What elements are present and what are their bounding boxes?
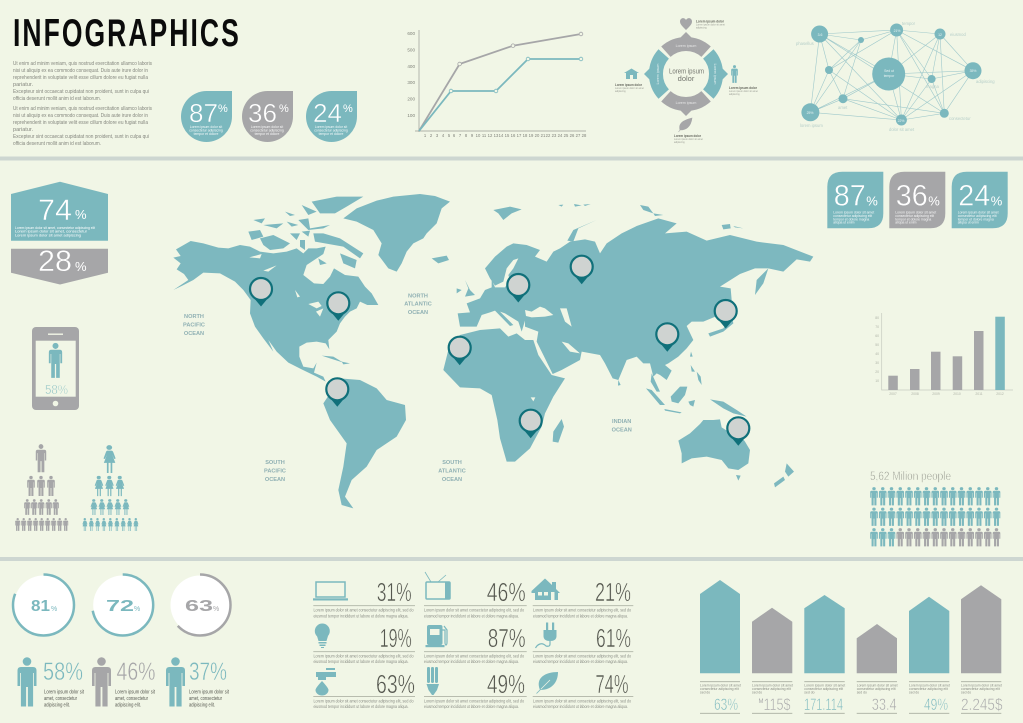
person stat 58%	[18, 657, 84, 708]
tab stat 87%	[827, 172, 883, 228]
tab stat 87%: consectetur adipiscing elit	[833, 214, 872, 218]
person stat 58%: amet, consectetur	[44, 696, 77, 702]
line chart: 100	[407, 113, 415, 118]
intro text block: Ut enim ad minim veniam, quis nostrud exercitation ullamco laboris	[13, 106, 152, 112]
house caption: Lorem ipsum dolor sit amet	[615, 87, 644, 90]
line chart: 10	[476, 133, 481, 138]
drop stat 24%: tempor et dolore	[319, 132, 343, 136]
arrow bar 2.245$: sed do	[961, 690, 971, 694]
stat grid: tv 46%: 46%	[487, 577, 526, 607]
people pyramid: men	[15, 444, 68, 531]
drop stat 87%	[181, 91, 232, 142]
line chart: 7	[459, 133, 462, 138]
network diagram: magna	[926, 84, 939, 89]
stat grid: fuel pump 87%: Lorem ipsum dolor sit amet consectetur adipiscing elit, sed do	[424, 654, 524, 658]
line chart: 600	[407, 31, 415, 36]
ocean label: north atlantic: NORTH	[408, 294, 428, 300]
people count heading: 5,62 Milion people	[870, 471, 951, 483]
title: INFOGRAPHICS	[13, 12, 239, 55]
bar chart: 50	[875, 343, 879, 347]
icon: person	[731, 65, 738, 83]
network diagram: amet	[838, 105, 848, 110]
person stat 37%: amet, consectetur	[189, 696, 222, 702]
donut 81%	[13, 574, 74, 636]
stat grid: energy-saving lamp 49%: Lorem ipsum dolor sit amet consectetur adipiscing elit, sed do	[424, 698, 524, 704]
intro text block: Ut enim ad minim veniam, quis nostrud exercitation ullamco laboris	[13, 61, 152, 67]
leaf caption	[674, 134, 703, 144]
cycle diagram: Lorem ipsum	[676, 44, 696, 48]
stat grid: light bulb 19%	[313, 623, 415, 664]
ocean label: indian	[612, 419, 632, 434]
stat grid: faucet 63%: Lorem ipsum dolor sit amet consectetur adipiscing elit, sed do	[314, 698, 414, 704]
person stat 37%	[166, 657, 229, 708]
person stat 58%: 58%	[43, 658, 83, 686]
person caption	[729, 86, 758, 96]
hexagon stat 28%	[11, 245, 108, 284]
stat grid: laptop 31%: eiusmod tempor incididunt ut labore et dolore magna aliqua.	[314, 614, 408, 618]
donut 81%: %	[51, 606, 57, 613]
ocean label: south pacific	[264, 460, 286, 483]
smartphone stat 58%	[32, 327, 79, 410]
bar chart: 80	[875, 316, 879, 320]
bar chart: 20	[875, 370, 879, 374]
stat grid: laptop 31%: Lorem ipsum dolor sit amet consectetur adipiscing elit, sed do	[314, 608, 414, 612]
tab stat 87%: 87	[834, 180, 866, 213]
heart caption	[696, 20, 725, 30]
icon: house	[624, 68, 639, 79]
people pyramid: women	[82, 445, 138, 531]
bar chart: 2007	[889, 392, 897, 396]
drop stat 87%: Lorem ipsum dolor sit	[190, 125, 222, 129]
tab stat 87%: aliqua ut enim	[833, 221, 855, 225]
americas and greenland	[173, 194, 450, 508]
people count pictogram	[870, 487, 1000, 546]
tab stat 24%: %	[991, 194, 1003, 209]
tab stat 24%: 24	[958, 180, 990, 213]
drop stat 36%: tempor et dolore	[255, 132, 279, 136]
stat grid: tv 46%: Lorem ipsum dolor sit amet consectetur adipiscing elit, sed do	[424, 608, 524, 612]
stat grid: fuel pump 87%	[424, 623, 527, 664]
tab stat 36%: tempor et dolore magna	[895, 217, 931, 221]
top section divider	[0, 156, 1023, 160]
donut 63%	[170, 574, 230, 636]
arrow bar 49%: Lorem ipsum dolor sit amet	[909, 684, 950, 688]
network diagram: 35%	[970, 69, 976, 73]
line chart: 2	[430, 133, 433, 138]
donut 72%: %	[134, 606, 140, 613]
intro text block	[13, 61, 152, 147]
line chart: 12	[488, 133, 493, 138]
drop stat 36%: %	[279, 103, 289, 115]
network diagram: dolor sit amet	[889, 127, 915, 132]
stat grid: leaf 74%: 74%	[596, 669, 628, 699]
stat grid: laptop 31%: 31%	[377, 577, 412, 607]
line chart: 21	[541, 133, 546, 138]
hexagon stat 74%: 74	[38, 194, 72, 227]
line chart: 18	[523, 133, 528, 138]
person stat 37%: adipiscing elit.	[189, 702, 215, 708]
icon: heart	[680, 18, 692, 30]
stat grid: house 21%: 21%	[595, 577, 631, 607]
ocean label: north atlantic: ATLANTIC	[404, 302, 432, 308]
intro text block: officia deserunt mollit anim id est laborum.	[13, 96, 101, 102]
line chart: 17	[517, 133, 522, 138]
cycle diagram: Lorem ipsum	[676, 101, 696, 105]
line chart: 8	[465, 133, 468, 138]
arrow bar 33.4: Lorem ipsum dolor sit amet	[857, 684, 898, 688]
stat grid: plug 61%: 61%	[596, 623, 631, 653]
bar chart: 10	[875, 379, 879, 383]
stat grid: leaf 74%: eiusmod tempor incididunt ut labore et dolore magna aliqua.	[533, 704, 628, 709]
tab stat 24%	[952, 172, 1008, 228]
tab stat 36%	[889, 172, 945, 228]
ocean label: indian: INDIAN	[612, 419, 631, 425]
ocean label: north pacific: PACIFIC	[183, 322, 205, 328]
stat grid: energy-saving lamp 49%	[424, 667, 527, 709]
stat grid: faucet 63%: eiusmod tempor incididunt ut labore et dolore magna aliqua.	[314, 704, 408, 709]
ocean label: south pacific: OCEAN	[265, 477, 285, 483]
arrow bar 63%	[700, 580, 741, 714]
line chart: 6	[453, 133, 456, 138]
arrow bar 115$	[752, 608, 793, 714]
arrow bar 115$: M	[758, 699, 764, 705]
cycle diagram: Lorem ipsum	[669, 66, 704, 76]
ocean label: south pacific: SOUTH	[265, 460, 285, 466]
donut 63%: 63	[185, 598, 213, 615]
arrow bar 2.245$: consectetur adipiscing elit	[961, 687, 1000, 691]
intro text block: nisi ut aliquip ex ea commodo consequat. Duis aute irure dolor in	[13, 68, 148, 74]
bar chart: 2010	[953, 392, 961, 396]
tab stat 36%: %	[928, 194, 940, 209]
network diagram	[796, 21, 995, 132]
arrow bar 63%: Lorem ipsum dolor sit amet	[700, 684, 741, 688]
map pins	[250, 256, 749, 446]
house caption: adipiscing	[615, 90, 626, 93]
stat grid: house 21%	[532, 577, 633, 618]
ocean label: south pacific: PACIFIC	[264, 468, 286, 474]
drop stat 24%: 24	[313, 98, 342, 128]
network diagram: adipiscing	[976, 79, 995, 84]
drop stat 87%: 87	[189, 98, 218, 128]
stat grid: light bulb 19%: Lorem ipsum dolor sit amet consectetur adipiscing elit, sed do	[314, 654, 414, 658]
drop stat 24%: Lorem ipsum dolor sit	[315, 125, 347, 129]
heart caption: Lorem ipsum dolor	[696, 20, 725, 24]
stat grid: energy-saving lamp 49%: 49%	[487, 669, 525, 699]
network diagram: consectetur	[949, 116, 971, 121]
line chart: 16	[511, 133, 516, 138]
ocean label: north atlantic: OCEAN	[408, 310, 428, 316]
intro text block: Excepteur sint occaecat cupidatat non proident, sunt in culpa qui	[13, 89, 149, 95]
stat grid: tv 46%: eiusmod tempor incididunt ut labore et dolore magna aliqua.	[424, 614, 519, 618]
line chart: 26	[570, 133, 575, 138]
drop stat 24%	[306, 91, 357, 142]
arrow bar 49%: 49%	[924, 695, 948, 714]
intro text block: pariatur.	[13, 127, 33, 133]
arrow bar 115$: 115$	[764, 695, 791, 714]
cycle diagram: Lorem ipsum	[656, 64, 660, 84]
arrow bar 49%: consectetur adipiscing elit	[909, 687, 948, 691]
stat grid: plug 61%: Lorem ipsum dolor sit amet consectetur adipiscing elit, sed do	[533, 654, 631, 658]
line chart: 15	[505, 133, 510, 138]
line chart: 22	[546, 133, 551, 138]
person stat 46%	[92, 657, 156, 708]
drop stat 36%: consectetur adipiscing	[250, 128, 284, 132]
intro text block: nisi ut aliquip ex ea commodo consequat. Duis aute irure dolor in	[13, 113, 148, 119]
network diagram: phasellus	[796, 41, 814, 46]
line chart: 5	[448, 133, 451, 138]
network diagram: 25%	[807, 111, 813, 115]
stat grid: tv 46%	[424, 572, 527, 618]
stat grid: plug 61%: eiusmod tempor incididunt ut labore et dolore magna aliqua.	[533, 659, 628, 664]
line chart: 200	[407, 96, 415, 102]
tab stat 24%: Lorem ipsum dolor sit amet	[958, 211, 999, 215]
bar chart: 2011	[975, 392, 983, 396]
arrow bar 171.114: Lorem ipsum dolor sit amet	[804, 684, 845, 688]
ocean label: south atlantic: OCEAN	[442, 477, 462, 483]
ocean label: indian: OCEAN	[612, 428, 632, 434]
stat grid: faucet 63%: 63%	[376, 669, 415, 699]
line chart	[407, 30, 587, 138]
tab stat 36%: consectetur adipiscing elit	[895, 214, 934, 218]
arrow bar 171.114: consectetur adipiscing elit	[804, 687, 843, 691]
bar chart: 2009	[932, 392, 940, 396]
world map	[173, 194, 813, 508]
tab stat 24%: tempor et dolore magna	[958, 217, 994, 221]
intro text block: reprehenderit in voluptate velit esse cillum dolore eu fugiat nulla	[13, 75, 148, 81]
donut 72%	[92, 574, 153, 636]
arrow bar 2.245$: 2.245$	[961, 695, 1003, 714]
line chart: 1	[424, 133, 427, 138]
hexagon stat 74%: %	[75, 207, 87, 222]
person stat 46%: Lorem ipsum dolor sit	[115, 690, 155, 696]
person stat 46%: amet, consectetur	[115, 696, 148, 702]
ocean label: north pacific: NORTH	[184, 314, 204, 320]
arrow bar 49%	[909, 597, 950, 714]
person caption: adipiscing	[729, 93, 740, 96]
heart caption: Lorem ipsum dolor sit amet	[696, 24, 725, 26]
hexagon stat 28%: 28	[38, 245, 72, 278]
person stat 58%: adipiscing elit.	[44, 702, 70, 708]
line chart: 27	[576, 133, 581, 138]
line chart: 9	[471, 133, 474, 138]
leaf caption: Lorem ipsum dolor sit amet	[674, 138, 703, 141]
arrow bar 63%: 63%	[714, 695, 738, 714]
stat grid: leaf 74%: Lorem ipsum dolor sit amet consectetur adipiscing elit, sed do	[533, 698, 631, 704]
intro text block: officia deserunt mollit anim id est laborum.	[13, 141, 101, 147]
tab stat 24%: consectetur adipiscing elit	[958, 214, 997, 218]
tab stat 87%: Lorem ipsum dolor sit amet	[833, 211, 874, 215]
tab stat 87%: %	[866, 194, 878, 209]
person stat 37%: Lorem ipsum dolor sit	[189, 690, 229, 696]
line chart: 300	[407, 80, 415, 85]
ocean label: south atlantic: SOUTH	[442, 460, 462, 466]
network diagram: eiusmod	[950, 32, 966, 37]
stat grid: fuel pump 87%: eiusmod tempor incididunt ut labore et dolore magna aliqua.	[424, 659, 519, 664]
bar chart: 40	[875, 352, 879, 356]
cycle diagram	[644, 32, 728, 116]
network diagram: 3.6	[818, 33, 822, 37]
person stat 46%: adipiscing elit.	[115, 702, 141, 708]
arrow bar 115$: Lorem ipsum dolor sit amet	[752, 684, 793, 688]
leaf caption: Lorem ipsum dolor	[674, 134, 702, 138]
arrow bar 33.4	[857, 624, 898, 714]
ocean label: south atlantic: ATLANTIC	[438, 468, 466, 474]
stat grid: energy-saving lamp 49%: eiusmod tempor incididunt ut labore et dolore magna aliqua.	[424, 704, 519, 709]
heart caption: adipiscing	[696, 26, 707, 30]
bottom section divider	[0, 557, 1023, 561]
arrow bar 33.4: consectetur adipiscing elit	[857, 687, 896, 691]
stat grid: plug 61%	[533, 622, 633, 664]
intro text block: pariatur.	[13, 82, 33, 88]
network diagram: 12	[938, 33, 942, 37]
arrow bar 63%: sed do	[700, 690, 710, 694]
stat grid: laptop 31%	[313, 577, 415, 618]
arrow bar 33.4: sed do	[857, 690, 867, 694]
line chart: 400	[407, 64, 415, 69]
drop stat 24%: consectetur adipiscing	[314, 128, 348, 132]
eurasia, africa and oceania	[443, 204, 813, 487]
network diagram: 22%	[898, 119, 904, 123]
arrow bar 2.245$: Lorem ipsum dolor sit amet	[961, 684, 1002, 688]
line chart: 23	[552, 133, 557, 138]
leaf caption: adipiscing	[674, 141, 685, 144]
arrow bar 2.245$	[961, 585, 1003, 714]
arrow bar 171.114: sed do	[804, 690, 815, 694]
line chart: 4	[442, 133, 445, 138]
arrow bar 115$: sed do	[752, 690, 762, 694]
hexagon stat 74%: Lorem ipsum dolor sit amet, consectetur adipiscing elit	[15, 226, 96, 230]
stat grid: leaf 74%	[533, 669, 633, 709]
bar chart: 30	[875, 361, 879, 365]
donut 72%: 72	[106, 598, 134, 615]
drop stat 24%: %	[343, 103, 353, 115]
person caption: Lorem ipsum dolor sit amet	[729, 90, 758, 93]
ocean label: south atlantic	[438, 460, 466, 483]
line chart: 20	[535, 133, 540, 138]
stat grid: faucet 63%	[313, 668, 415, 709]
tab stat 36%: 36	[896, 180, 928, 213]
hexagon stat 28%: %	[75, 259, 87, 274]
stat grid: house 21%: eiusmod tempor incididunt ut labore et dolore magna aliqua.	[533, 614, 628, 618]
drop stat 36%	[242, 91, 293, 142]
network diagram: Sed ut	[884, 69, 894, 73]
bar chart: 2008	[911, 392, 919, 396]
stat grid: fuel pump 87%: 87%	[488, 623, 526, 653]
stat grid: light bulb 19%: eiusmod tempor incididunt ut labore et dolore magna aliqua.	[314, 659, 408, 664]
smartphone stat 58%: 58%	[45, 382, 68, 397]
icon: leaf	[678, 118, 692, 132]
cycle diagram: Lorem ipsum	[713, 64, 717, 84]
line chart: 11	[482, 133, 487, 138]
intro text block: reprehenderit in voluptate velit esse cillum dolore eu fugiat nulla	[13, 120, 148, 126]
bar chart: 60	[875, 334, 879, 338]
hexagon stat 74%	[11, 182, 108, 241]
line chart: 13	[494, 133, 499, 138]
network diagram: 21%	[894, 29, 900, 33]
network diagram: tempor	[884, 74, 895, 78]
arrow bar 63%: consectetur adipiscing elit	[700, 687, 739, 691]
line chart: 25	[564, 133, 569, 138]
person stat 37%: 37%	[189, 658, 227, 686]
house caption: Lorem ipsum dolor	[615, 83, 643, 87]
line chart: 28	[582, 133, 587, 138]
bar chart: 2012	[996, 392, 1004, 396]
line chart: 19	[529, 133, 534, 138]
tab stat 24%: aliqua ut enim	[958, 221, 979, 225]
line chart: 3	[436, 133, 439, 138]
arrow bar 33.4: 33.4	[872, 695, 897, 714]
stat grid: light bulb 19%: 19%	[380, 623, 412, 653]
person stat 58%: Lorem ipsum dolor sit	[44, 690, 84, 696]
hexagon stat 74%: Lorem ipsum dolor sit amet adipiscing	[15, 234, 81, 238]
ocean label: north pacific	[183, 314, 205, 337]
tab stat 87%: tempor et dolore magna	[833, 217, 869, 221]
person stat 46%: 46%	[116, 658, 156, 686]
arrow bar 49%: sed do	[909, 690, 919, 694]
drop stat 87%: tempor et dolore	[194, 132, 218, 136]
line chart: 500	[407, 48, 415, 52]
ocean label: north atlantic	[404, 294, 432, 316]
person caption: Lorem ipsum dolor	[729, 86, 758, 90]
house caption	[615, 83, 644, 93]
stat grid: house 21%: Lorem ipsum dolor sit amet consectetur adipiscing elit, sed do	[533, 608, 631, 612]
donut 81%: 81	[31, 598, 50, 615]
bar chart: 70	[875, 325, 879, 329]
drop stat 36%: 36	[248, 98, 277, 128]
tab stat 36%: Lorem ipsum dolor sit amet	[895, 211, 936, 215]
hexagon stat 74%: Lorem ipsum dolor sit amet, consectetur	[15, 230, 88, 234]
network diagram: tempor	[902, 21, 916, 26]
drop stat 87%: consectetur adipiscing	[189, 128, 223, 132]
donut 63%: %	[213, 606, 219, 613]
bar chart	[875, 313, 1013, 396]
arrow bar 171.114: 171.114	[804, 695, 843, 714]
ocean label: north pacific: OCEAN	[184, 331, 204, 337]
tab stat 36%: aliqua ut enim	[895, 221, 917, 225]
drop stat 87%: %	[218, 103, 228, 115]
arrow bar 171.114	[804, 595, 845, 714]
cycle diagram: dolor	[678, 74, 695, 83]
drop stat 36%: Lorem ipsum dolor sit	[251, 125, 283, 129]
arrow bar 115$: consectetur adipiscing elit	[752, 687, 791, 691]
line chart: 24	[558, 133, 563, 138]
intro text block: Excepteur sint occaecat cupidatat non proident, sunt in culpa qui	[13, 134, 149, 140]
network diagram: lorem ipsum	[800, 123, 823, 128]
line chart: 14	[499, 133, 504, 138]
